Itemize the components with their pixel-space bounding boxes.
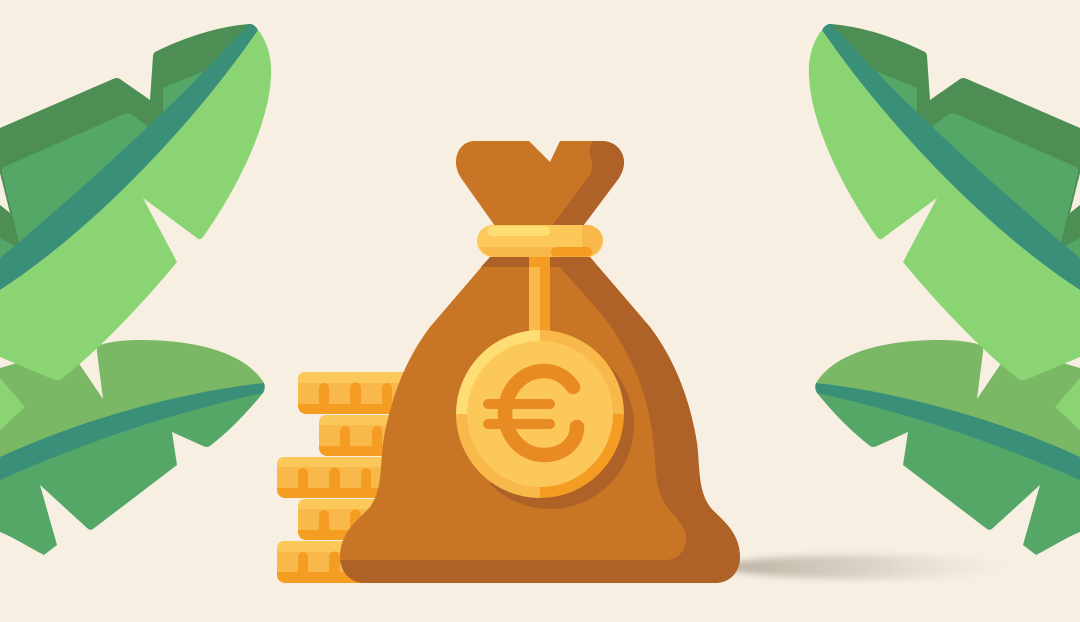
tie ring bbox=[477, 225, 603, 257]
coin shadow on bag bbox=[490, 358, 634, 509]
euro symbol bbox=[488, 371, 577, 455]
euro coin bbox=[456, 330, 624, 498]
bag shaded side bbox=[340, 257, 740, 583]
left banana leaves bbox=[0, 24, 271, 555]
money bag bbox=[340, 141, 740, 583]
coin 5 bbox=[277, 541, 387, 583]
upper right leaf bbox=[809, 24, 1080, 380]
ground shadow bbox=[725, 555, 1015, 579]
upper left leaf bbox=[0, 24, 271, 380]
lower left leaf bbox=[0, 340, 265, 555]
right banana leaves bbox=[809, 24, 1080, 555]
coin 3 bbox=[277, 457, 427, 498]
coin 1 bbox=[298, 372, 428, 414]
coin stack bbox=[277, 372, 429, 583]
coin 2 bbox=[319, 415, 429, 456]
lower right leaf bbox=[815, 340, 1080, 555]
bag body bbox=[340, 257, 740, 583]
bag neck bbox=[456, 141, 624, 226]
hanging strap bbox=[529, 257, 550, 331]
coin 4 bbox=[298, 499, 408, 540]
